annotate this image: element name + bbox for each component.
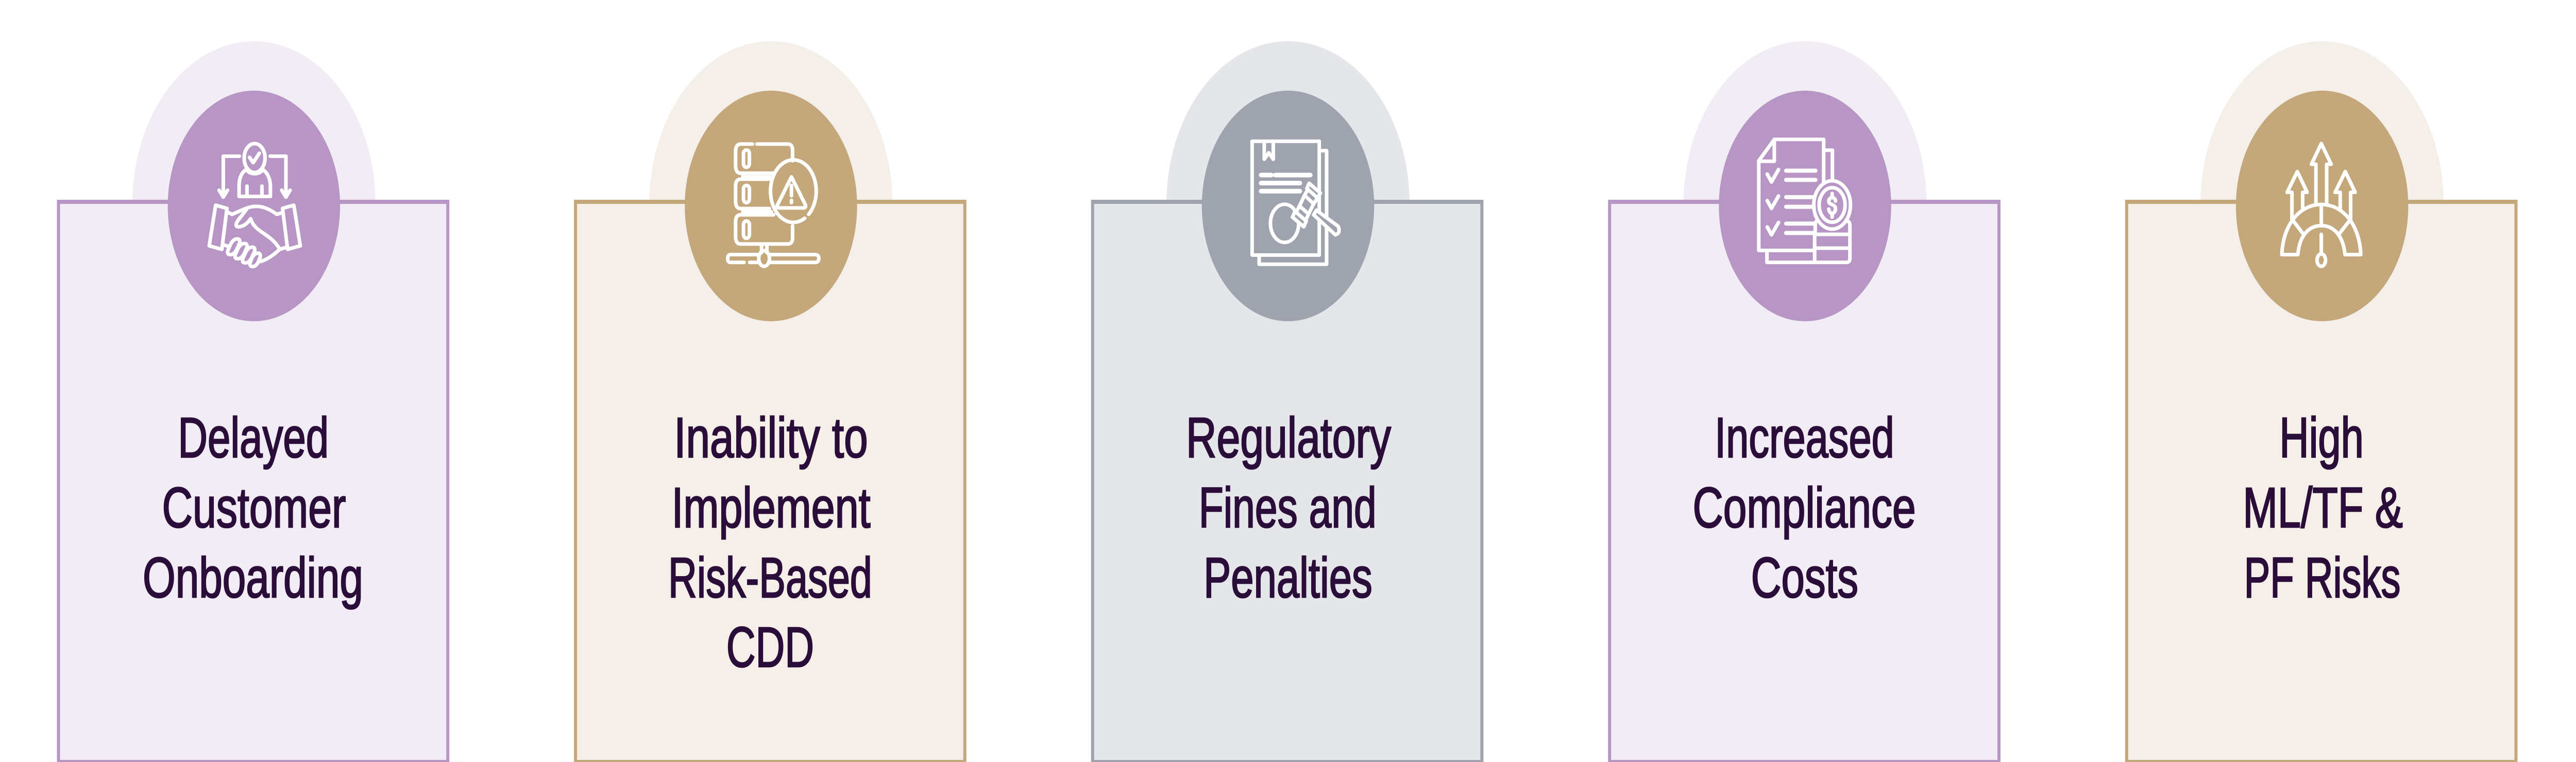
heading: High xyxy=(2279,406,2364,470)
panel: Increased Compliance Costs xyxy=(1608,41,2001,762)
heading: CDD xyxy=(726,615,814,679)
heading: Penalties xyxy=(1204,546,1372,610)
halo circle xyxy=(132,41,376,367)
icon badge xyxy=(685,91,857,321)
heading: Fines and xyxy=(1199,476,1377,540)
panel: Regulatory Fines and Penalties xyxy=(1091,41,1483,762)
heading: Customer xyxy=(162,476,346,540)
panel: High ML/TF & PF Risks xyxy=(2125,41,2517,762)
halo circle xyxy=(1684,41,1927,367)
icon: person over handshake xyxy=(209,144,300,267)
icon: server with warning magnifier xyxy=(727,144,819,266)
icon: risk gauge with rising arrows xyxy=(2282,144,2361,266)
heading: ML/TF & xyxy=(2243,476,2403,540)
halo circle xyxy=(649,41,892,367)
heading: Regulatory xyxy=(1186,406,1391,470)
heading: Onboarding xyxy=(143,546,363,610)
halo circle xyxy=(2200,41,2444,367)
icon: rulebook and gavel xyxy=(1252,141,1339,264)
heading xyxy=(668,406,872,679)
heading: PF Risks xyxy=(2244,546,2400,610)
heading: Inability to xyxy=(674,406,868,470)
icon badge xyxy=(168,91,340,321)
panel: Inability to Implement Risk-Based CDD xyxy=(574,41,967,762)
card xyxy=(57,200,449,762)
heading: Increased xyxy=(1715,406,1894,470)
card xyxy=(2125,200,2517,762)
heading: Delayed xyxy=(178,406,329,470)
halo circle xyxy=(1166,41,1410,367)
icon badge xyxy=(1202,91,1374,321)
icon badge xyxy=(1719,91,1891,321)
panel: Delayed Customer Onboarding xyxy=(57,41,449,762)
heading: Risk-Based xyxy=(668,546,872,610)
heading: Implement xyxy=(672,476,871,540)
heading xyxy=(2243,406,2403,610)
card xyxy=(1608,200,2001,762)
heading: Costs xyxy=(1751,546,1858,610)
heading xyxy=(1693,406,1916,610)
heading: Compliance xyxy=(1693,476,1916,540)
heading xyxy=(143,406,363,610)
heading xyxy=(1186,406,1391,610)
icon: checklist with coins xyxy=(1759,140,1851,263)
card xyxy=(1091,200,1483,762)
icon badge xyxy=(2236,91,2408,321)
card xyxy=(574,200,967,762)
